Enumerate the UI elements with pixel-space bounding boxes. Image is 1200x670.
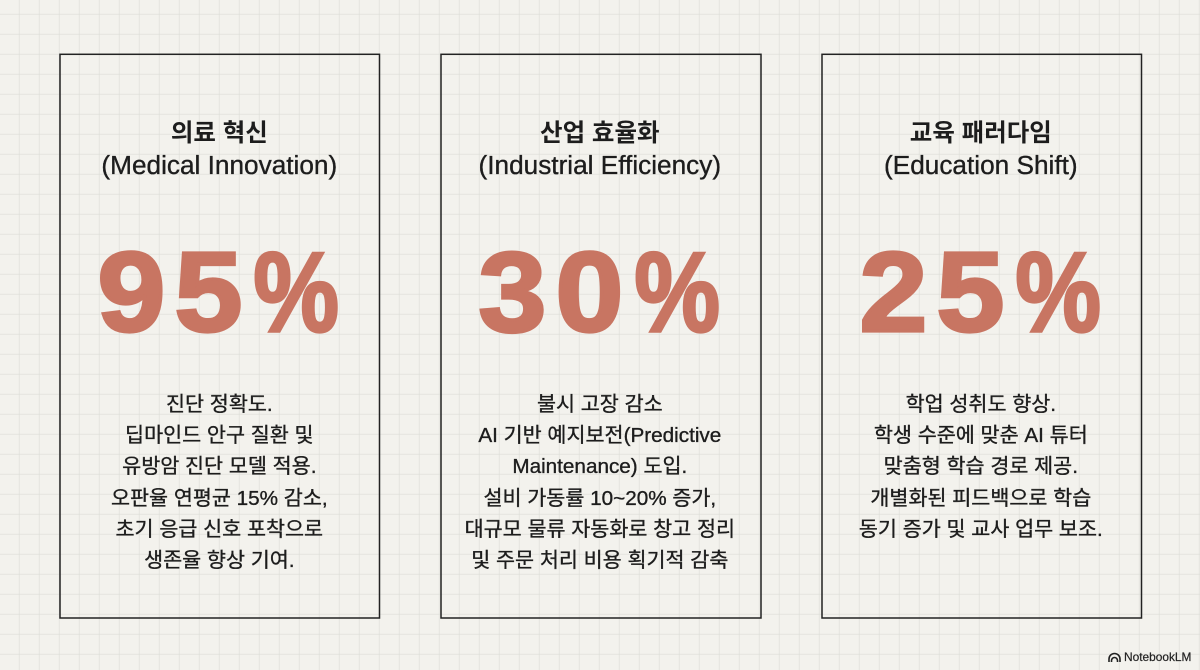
text block: education description: 학생 수준에 맞춘 AI 튜터 [874,424,1088,447]
heading: medical innovation [101,120,337,180]
statistic: 30%: 3 [478,229,546,355]
statistic: 95%: 5 [175,229,242,355]
text block: education description [859,393,1103,541]
statistic: 25%: 5 [936,229,1004,355]
text block: medical description: 딥마인드 안구 질환 및 [125,424,314,447]
statistic: 25%: % [1015,229,1101,355]
text block: industrial description: 불시 고장 감소 [537,393,663,416]
heading: medical innovation: (Medical Innovation) [101,150,337,180]
heading: industrial efficiency [479,120,721,180]
text block: medical description: 진단 정확도. [166,393,273,416]
statistic: 30%: % [634,229,720,355]
heading: education shift [884,120,1078,180]
text block: industrial description: Maintenance) 도입. [512,455,687,478]
icon: NotebookLM logo mark [1108,652,1121,662]
panel: medical innovation [59,54,380,619]
text block: education description: 맞춤형 학습 경로 제공. [884,455,1078,478]
statistic: 30% [478,229,720,355]
text block: industrial description: 설비 가동률 10~20% 증가, [483,487,716,510]
logo text: NotebookLM [1124,650,1191,664]
statistic: 25%: 2 [859,229,927,355]
statistic: 95%: % [254,229,339,355]
statistic: 30%: 0 [555,229,623,355]
panel: education shift [821,54,1142,619]
text block: medical description: 유방암 진단 모델 적용. [122,455,316,478]
heading: industrial efficiency: 산업 효율화 [540,120,660,146]
text block: education description: 학업 성취도 향상. [906,393,1056,416]
text block: education description: 동기 증가 및 교사 업무 보조. [859,518,1103,541]
text block: industrial description: 대규모 물류 자동화로 창고 정리 [465,518,735,541]
panel: industrial efficiency [440,54,762,619]
text block: medical description: 오판율 연평균 15% 감소, [111,487,328,510]
text block: medical description: 초기 응급 신호 포착으로 [116,518,323,541]
text block: education description: 개별화된 피드백으로 학습 [870,487,1091,510]
statistic: 95% [98,229,339,355]
heading: education shift: (Education Shift) [884,150,1078,180]
text block: industrial description [465,393,735,572]
statistic: 95%: 9 [98,229,165,355]
text block: medical description [111,393,328,572]
heading: medical innovation: 의료 혁신 [171,120,268,146]
heading: education shift: 교육 패러다임 [910,120,1052,146]
text block: industrial description: AI 기반 예지보전(Predictive [478,424,721,447]
text block: industrial description: 및 주문 처리 비용 획기적 감축 [471,549,728,572]
text block: medical description: 생존율 향상 기여. [144,549,295,572]
statistic: 25% [859,229,1101,355]
heading: industrial efficiency: (Industrial Efficiency) [479,150,721,180]
